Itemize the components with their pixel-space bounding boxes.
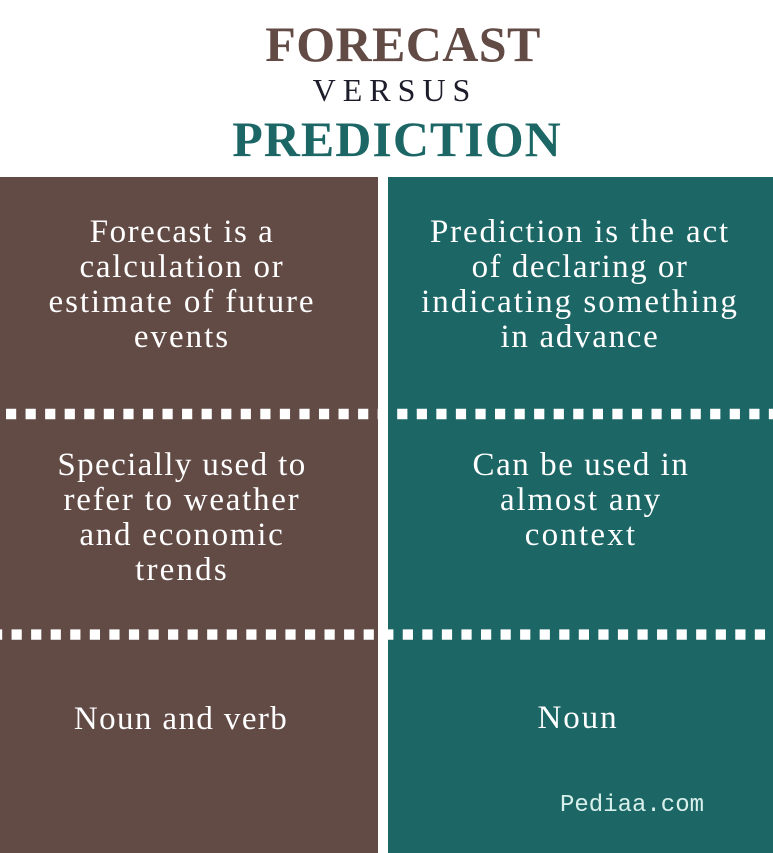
title: Prediction: PREDICTION: [232, 111, 562, 167]
text: forecast usage: Specially used to: [57, 447, 307, 483]
text: forecast definition: calculation or: [79, 249, 285, 285]
dotted divider: upper: [6, 408, 773, 420]
text: prediction definition: [421, 214, 739, 355]
text: prediction usage: context: [525, 517, 637, 553]
text: prediction definition: in advance: [500, 319, 660, 355]
text: forecast usage: and economic: [79, 517, 285, 553]
panel: forecast column: [0, 177, 378, 853]
text: prediction definition: indicating something: [421, 284, 739, 320]
text: forecast usage: refer to weather: [64, 482, 300, 518]
text: forecast definition: events: [134, 319, 230, 355]
text: prediction definition: Prediction is the act: [430, 214, 730, 250]
dotted divider: lower: [0, 629, 766, 640]
text: forecast definition: estimate of future: [49, 284, 315, 320]
text: forecast definition: [49, 214, 315, 355]
panel: prediction column: [388, 177, 773, 853]
text: prediction usage: almost any: [500, 482, 662, 518]
text: forecast definition: Forecast is a: [90, 214, 274, 250]
text: forecast usage: trends: [135, 552, 229, 588]
text: prediction part of speech: Noun: [538, 700, 618, 736]
text: forecast usage: [57, 447, 307, 588]
text: prediction usage: Can be used in: [473, 447, 689, 483]
text: prediction usage: [473, 447, 689, 553]
title: Forecast: FORECAST: [265, 16, 541, 72]
text: prediction definition: of declaring or: [472, 249, 688, 285]
subtitle: versus: VERSUS: [313, 72, 477, 108]
logo: Pediaa.com: Pediaa.com: [560, 792, 704, 819]
text: forecast part of speech: Noun and verb: [74, 701, 288, 737]
